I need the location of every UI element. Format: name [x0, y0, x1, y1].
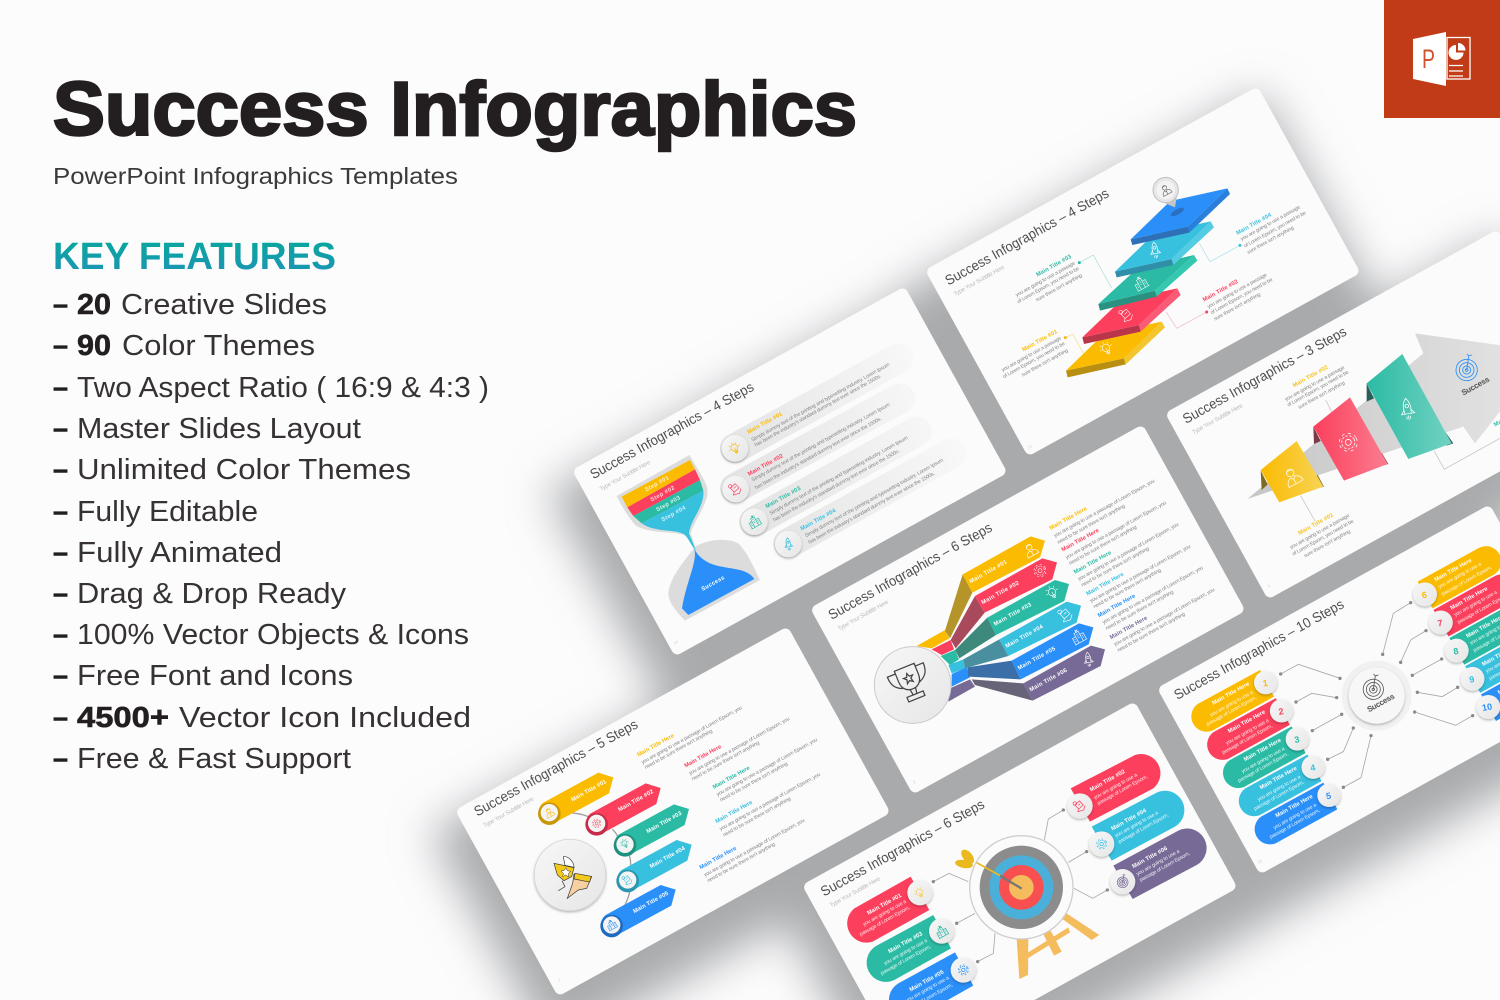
pill 02: passage of Lorem Epsom,: [1096, 774, 1149, 807]
callout 02: Main Title #02: [1202, 279, 1240, 303]
step row 3: Simply dummy text of the printing and typesetting industry. Lorem Ipsum: [769, 435, 909, 517]
step 4 pill: you are going to use a: [1257, 774, 1302, 803]
key features list: Color Themes: [122, 330, 315, 362]
callout 02: of Lorem Epsom, you need to be: [1210, 277, 1274, 316]
arrow 04: Main Title #04: [649, 845, 687, 870]
step 5 pill: [1255, 783, 1341, 844]
key features list: Unlimited Color Themes: [77, 454, 411, 486]
key features list: –: [53, 413, 68, 445]
arrow 06: [948, 646, 1105, 702]
step 2 pill: [1207, 698, 1293, 760]
text block 02: need to be sure there isn't anything: [691, 740, 761, 782]
key features list: Master Slides Layout: [77, 413, 361, 445]
arrow 05: Main Title #05: [1017, 646, 1057, 672]
key features list: Free & Fast Support: [77, 743, 351, 775]
text block 01: you are going to use a passage of Lorem Epsom, you: [1053, 478, 1156, 539]
page number: 2: [912, 779, 917, 785]
step row 4: has been the industry's standard dummy text ever since the 1500s.: [807, 471, 936, 546]
step 9 pill: 9: [1468, 674, 1475, 685]
page number: 13: [1026, 443, 1033, 450]
pill 03: passage of Lorem Epsom,: [880, 944, 932, 977]
step 3 pill: you are going to use a: [1241, 746, 1286, 775]
callout 02: [1202, 272, 1274, 322]
trophy circle: [874, 647, 951, 723]
arrow 05: Main Title #05: [632, 890, 670, 915]
arrow 01: [917, 536, 1045, 648]
key features list: –: [53, 537, 68, 569]
plate: red: [1082, 288, 1181, 344]
step 2 pill: Main Title Here: [1227, 709, 1267, 735]
hourglass: [617, 455, 760, 621]
slide: 3 steps arrow: [1165, 229, 1500, 599]
slide subtitle: Type Your Subtitle Here: [482, 796, 536, 829]
step row 1: Main Title #01: [746, 411, 784, 436]
slide title: Success Infographics – 6 Steps: [825, 519, 995, 623]
slide: target 6 steps: [802, 701, 1238, 1000]
callout 03: of Lorem Epsom, you need to be: [1016, 266, 1081, 305]
pill 01: Main Title #01: [866, 893, 903, 917]
slide: 6 steps arrows: [810, 424, 1246, 794]
plate: blue: [1131, 188, 1230, 245]
pill 02: you are going to use a: [1093, 772, 1139, 801]
pill 04: [1089, 791, 1184, 861]
key features list: Fully Editable: [77, 496, 258, 528]
text block 05: Main Title Here: [699, 845, 738, 871]
arrow 02: [585, 783, 661, 836]
pill 02: Main Title #02: [1089, 769, 1127, 793]
callout 01: you are going to use a passage: [1289, 513, 1351, 551]
connector lines: [1301, 400, 1500, 521]
key features list: 20: [77, 289, 111, 321]
arrow 01: Main Title #01: [969, 559, 1009, 585]
text block 02: you are going to use a passage of Lorem Epsom, you: [1065, 500, 1168, 561]
pill 03: you are going to use a: [883, 938, 929, 967]
step row 2: has been the industry's standard dummy text ever since the 1500s.: [754, 416, 883, 491]
text block 06: Main Title Here: [1109, 615, 1149, 641]
slide: 5 steps: [455, 626, 891, 996]
text block 05: you are going to use a passage of Lorem Epsom, you: [1101, 565, 1204, 626]
text block 06: you are going to use a passage of Lorem Epsom, you: [1113, 587, 1216, 648]
step row 4: [775, 453, 952, 557]
step 6 pill: you are going to use a: [1437, 561, 1483, 590]
callout 02: sure there isn't anything: [1213, 292, 1262, 322]
step row 1: Simply dummy text of the printing and typesetting industry. Lorem Ipsum: [750, 362, 891, 443]
callout 02: sure there isn't anything: [1297, 380, 1346, 411]
text block 05: need to be sure there isn't anything: [706, 842, 776, 884]
callout 02: you are going to use a passage: [1284, 365, 1346, 403]
step 6 pill: [1413, 546, 1500, 608]
step 9 pill: [1460, 631, 1500, 693]
step 7 pill: 7: [1437, 618, 1443, 628]
arrow 04: [616, 840, 692, 892]
key features list: Free Font and Icons: [77, 660, 353, 692]
key features list: 4500+: [77, 702, 169, 734]
success target icon: Success: [1460, 374, 1492, 397]
step 1 pill: [1191, 670, 1277, 732]
callout 04: you are going to use a passage: [1240, 204, 1302, 242]
key features list: Two Aspect Ratio ( 16:9 & 4:3 ): [77, 372, 489, 404]
step 6 pill: 6: [1421, 590, 1428, 600]
hourglass: Success: [701, 575, 726, 593]
page number: 7: [557, 977, 562, 983]
key features list: –: [53, 578, 68, 610]
arrow 03: [614, 804, 689, 857]
slide title: Success Infographics – 4 Steps: [942, 185, 1111, 288]
step 10 pill: 10: [1481, 701, 1493, 713]
step 4 pill: 4: [1309, 762, 1316, 773]
step 7 pill: Main Title Here: [1450, 586, 1490, 612]
slide shadows: [431, 93, 1500, 1000]
arrow 04: [948, 602, 1081, 673]
step row 3: [741, 432, 917, 535]
plate: turquoise: [1115, 221, 1214, 277]
step 1 pill: 1: [1262, 678, 1269, 689]
panel: yellow fold: [1261, 441, 1324, 502]
step 5 pill: Main Title Here: [1275, 794, 1315, 819]
text block 05: you are going to use a passage of Lorem Epsom, you: [703, 818, 806, 878]
step 3 pill: Main Title Here: [1243, 737, 1283, 763]
arrow 05: [600, 885, 676, 937]
callout 02: of Lorem Epsom, you need to be: [1286, 369, 1350, 408]
step 3 pill: [1223, 726, 1309, 788]
arrow 02: Main Title #02: [981, 580, 1021, 606]
arrow 04: Main Title #04: [1005, 624, 1045, 650]
arrow 01: Main Title #01: [570, 779, 608, 803]
step row 2: Simply dummy text of the printing and typesetting industry. Lorem Ipsum: [751, 402, 891, 483]
pill 01: [847, 877, 933, 943]
page number: 10: [1256, 858, 1263, 865]
slide subtitle: Type Your Subtitle Here: [829, 876, 882, 909]
step 2 pill: 2: [1278, 706, 1284, 717]
text block 02: Main Title Here: [684, 744, 723, 769]
center success circle: Success: [1366, 691, 1397, 714]
connector lines: [932, 808, 1109, 963]
key features list: Creative Slides: [121, 289, 327, 321]
slide subtitle: Type Your Subtitle Here: [599, 460, 652, 493]
text block 02: Main Title Here: [1061, 527, 1101, 553]
main title: Success Infographics: [53, 67, 857, 152]
step 5 pill: passage of Lorem Epsom,: [1269, 808, 1321, 840]
text block 05: Main Title Here: [1097, 593, 1137, 619]
key features list: [53, 289, 489, 775]
callout 04: sure there isn't anything: [1246, 225, 1295, 256]
page number: 4: [1267, 583, 1272, 589]
callout 01: of Lorem Epsom, you need to be: [1002, 341, 1066, 380]
hourglass: Step #01: [644, 475, 671, 493]
step 7 pill: [1429, 574, 1500, 636]
pin icon: [1153, 177, 1178, 207]
dart: [954, 847, 1022, 889]
center success circle: [1342, 661, 1412, 731]
step 8 pill: 8: [1453, 646, 1459, 657]
text block 03: you are going to use a passage of Lorem Epsom, you: [716, 737, 819, 798]
step 7 pill: you are going to use a: [1453, 590, 1499, 618]
text block 03: you are going to use a passage of Lorem Epsom, you: [1077, 522, 1180, 582]
connecting curve: [570, 813, 631, 905]
pill 03: Main Title #03: [887, 931, 924, 955]
step 4 pill: passage of Lorem Epsom,: [1253, 780, 1305, 812]
slide title: Success Infographics – 3 Steps: [1180, 323, 1349, 427]
text block 06: need to be sure there isn't anything: [1116, 611, 1186, 654]
key features list: –: [53, 619, 68, 651]
plate: yellow: [1066, 322, 1165, 377]
text block 04: Main Title Here: [1085, 571, 1126, 597]
text block 01: Main Title Here: [636, 733, 676, 758]
callout 04: of Lorem Epsom, you need to be: [1243, 210, 1307, 249]
step 10 pill: [1476, 659, 1500, 721]
slide subtitle: Type Your Subtitle Here: [953, 265, 1006, 298]
step row 4: Simply dummy text of the printing and typesetting industry. Lorem Ipsum: [804, 458, 945, 539]
step row 3: has been the industry's standard dummy text ever since the 1500s.: [772, 448, 901, 523]
slide: 4 steps stairs: [925, 86, 1361, 456]
callout 04: Main Title #04: [1235, 212, 1273, 237]
panel: red fold: [1313, 397, 1388, 481]
step 3 pill: passage of Lorem Epsom,: [1237, 751, 1290, 784]
step row 4: Main Title #04: [800, 508, 838, 532]
slide title: Success Infographics – 10 Steps: [1171, 596, 1346, 703]
step 8 pill: [1445, 603, 1500, 665]
key features list: –: [53, 702, 68, 734]
panel: teal fold: [1367, 354, 1453, 459]
pill 06: [1110, 829, 1207, 899]
slide subtitle: Type Your Subtitle Here: [837, 599, 890, 632]
pill 02: [1067, 754, 1160, 822]
key features list: 90: [77, 330, 111, 362]
success target icon: [1451, 352, 1492, 397]
callout 01: Main Title #01: [1021, 329, 1059, 353]
arrow 03: Main Title #03: [993, 602, 1033, 628]
callout 03: you are going to use a passage: [1015, 260, 1077, 298]
key features list: –: [53, 660, 68, 692]
text block 03: Main Title Here: [1073, 550, 1113, 576]
step row 1: [722, 358, 898, 462]
arrow 01: [538, 773, 613, 825]
callout 03: Main Title #03: [1035, 254, 1073, 278]
powerpoint badge: [1384, 0, 1500, 118]
key features list: Drag & Drop Ready: [77, 578, 347, 610]
callout 01: you are going to use a passage: [1001, 335, 1063, 373]
arrow 02: Main Title #02: [617, 789, 655, 813]
pill 03: [867, 915, 954, 982]
arrow 05: [952, 623, 1093, 687]
hourglass: Step #04: [661, 505, 688, 523]
text block 04: you are going to use a passage of Lorem Epsom, you: [719, 772, 822, 832]
pill 01: passage of Lorem Epsom,: [859, 905, 911, 938]
slide title: Success Infographics – 6 Steps: [818, 796, 987, 899]
step row 3: Main Title #03: [765, 485, 803, 510]
easel: [1017, 912, 1099, 979]
key features list: –: [53, 454, 68, 486]
step 1 pill: Main Title Here: [1211, 681, 1251, 707]
step 6 pill: Main Title Here: [1434, 558, 1474, 583]
hourglass: Step #03: [655, 495, 682, 513]
text block 02: you are going to use a passage of Lorem Epsom, you: [688, 716, 791, 777]
subtitle: PowerPoint Infographics Templates: [53, 163, 458, 189]
slide subtitle: Type Your Subtitle Here: [1191, 403, 1245, 436]
key features list: –: [53, 330, 68, 362]
pill 06: passage of Lorem Epsom,: [1139, 851, 1191, 883]
icon: powerpoint logo: P: [1422, 44, 1435, 74]
pill 05: [889, 952, 976, 1000]
key features list: –: [53, 372, 68, 404]
arrow 02: [932, 558, 1057, 655]
text block 03: need to be sure there isn't anything: [719, 761, 789, 803]
callout 01: sure there isn't anything: [1021, 348, 1070, 378]
text block 01: need to be sure there isn't anything: [644, 728, 714, 771]
step 4 pill: [1239, 754, 1325, 816]
text block 04: need to be sure there isn't anything: [722, 796, 792, 838]
callout 01: sure there isn't anything: [1303, 529, 1352, 559]
key features list: –: [53, 289, 68, 321]
text block 04: Main Title Here: [715, 799, 754, 825]
text block 04: you are going to use a passage of Lorem Epsom, you: [1089, 544, 1192, 604]
callout 01: Main Title #01: [1297, 512, 1335, 537]
target: [970, 836, 1073, 939]
callout 03: sure there isn't anything: [1035, 273, 1084, 303]
pill 04: you are going to use a: [1114, 810, 1160, 839]
hourglass: Step #02: [650, 485, 677, 503]
pill 06: Main Title #06: [1131, 845, 1169, 870]
text block 01: you are going to use a passage of Lorem Epsom, you: [640, 705, 743, 766]
arrow 03: Main Title #03: [646, 810, 684, 835]
key features list: –: [53, 496, 68, 528]
arrow 06: Main Title #06: [1029, 667, 1069, 693]
text block 01: Main Title Here: [1049, 506, 1089, 532]
gray arrow: [1247, 333, 1500, 499]
step 6 pill: passage of Lorem Epsom,: [1441, 565, 1493, 597]
arrow 03: [941, 580, 1069, 665]
slide title: Success Infographics – 4 Steps: [587, 378, 756, 482]
callout 04: [1235, 204, 1307, 256]
slide: 10 steps: [1157, 504, 1500, 874]
pill 04: passage of Lorem Epsom,: [1117, 812, 1170, 845]
connector lines: [1065, 243, 1240, 353]
trophy circle: [534, 839, 606, 911]
step 2 pill: passage of Lorem Epsom,: [1221, 723, 1274, 756]
step 2 pill: you are going to use a: [1225, 718, 1270, 747]
pill 04: Main Title #04: [1110, 808, 1148, 832]
key features list: Fully Animated: [77, 537, 282, 569]
slide: hourglass 4 steps: [572, 286, 1008, 656]
step 1 pill: passage of Lorem Epsom,: [1205, 695, 1258, 728]
pill 01: you are going to use a: [862, 899, 908, 928]
text block 03: Main Title Here: [712, 765, 752, 791]
pill 05: Main Title #05: [909, 969, 946, 993]
step 3 pill: 3: [1294, 734, 1300, 745]
step row 1: has been the industry's standard dummy text ever since the 1500s.: [754, 373, 883, 448]
text block 03: need to be sure there isn't anything: [1080, 546, 1150, 588]
step row 2: Main Title #02: [747, 453, 785, 478]
text block 05: need to be sure there isn't anything: [1105, 589, 1175, 632]
key features list: 100% Vector Objects & Icons: [77, 619, 469, 651]
callout 02: you are going to use a passage: [1206, 272, 1268, 310]
slide title: Success Infographics – 5 Steps: [471, 716, 640, 819]
key features heading: KEY FEATURES: [53, 236, 336, 278]
text block 02: need to be sure there isn't anything: [1068, 524, 1138, 567]
key features list: –: [53, 743, 68, 775]
page number: 14: [672, 639, 679, 646]
callout 01: of Lorem Epsom, you need to be: [1291, 518, 1355, 557]
step 4 pill: Main Title Here: [1259, 765, 1299, 791]
text block 04: need to be sure there isn't anything: [1092, 568, 1162, 610]
connector lines: [1279, 601, 1474, 789]
pill 06: you are going to use a: [1135, 849, 1181, 877]
callout 02: Main Title #02: [1292, 364, 1330, 389]
step 5 pill: 5: [1325, 791, 1332, 801]
step 5 pill: you are going to use a: [1272, 802, 1318, 831]
key features list: Vector Icon Included: [179, 702, 471, 734]
text block 01: need to be sure there isn't anything: [1056, 503, 1126, 546]
plate: teal: [1098, 255, 1197, 311]
step 1 pill: you are going to use a: [1209, 690, 1254, 718]
step row 2: [722, 398, 900, 502]
